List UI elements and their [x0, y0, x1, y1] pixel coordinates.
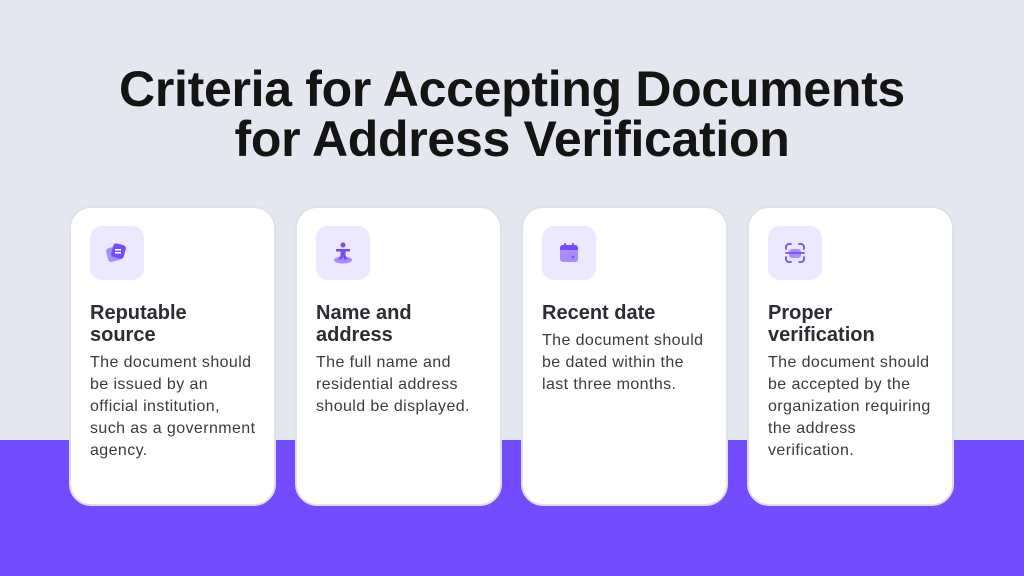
heading: Recent date: [542, 302, 655, 324]
icon: scan: [768, 226, 822, 280]
card: reputable source: [69, 206, 276, 506]
text: The document should be accepted by the organization requiring the address verification.: [768, 354, 931, 459]
icon: documents: [90, 226, 144, 280]
title: Criteria for Accepting Documents: [119, 61, 905, 117]
text: The document should be issued by an official institution, such as a government agency.: [90, 354, 255, 459]
card: proper verification: [747, 206, 954, 506]
text: The document should be dated within the last three months.: [542, 332, 703, 393]
heading: Name and address: [316, 302, 412, 346]
heading: Proper verification: [768, 302, 875, 346]
card: recent date: [521, 206, 728, 506]
heading: Reputable source: [90, 302, 187, 346]
icon: person: [316, 226, 370, 280]
purple band: [0, 440, 1024, 576]
card: name and address: [295, 206, 502, 506]
icon: calendar: [542, 226, 596, 280]
title: for Address Verification: [234, 111, 789, 167]
text: The full name and residential address should be displayed.: [316, 354, 470, 415]
title: [119, 61, 905, 167]
